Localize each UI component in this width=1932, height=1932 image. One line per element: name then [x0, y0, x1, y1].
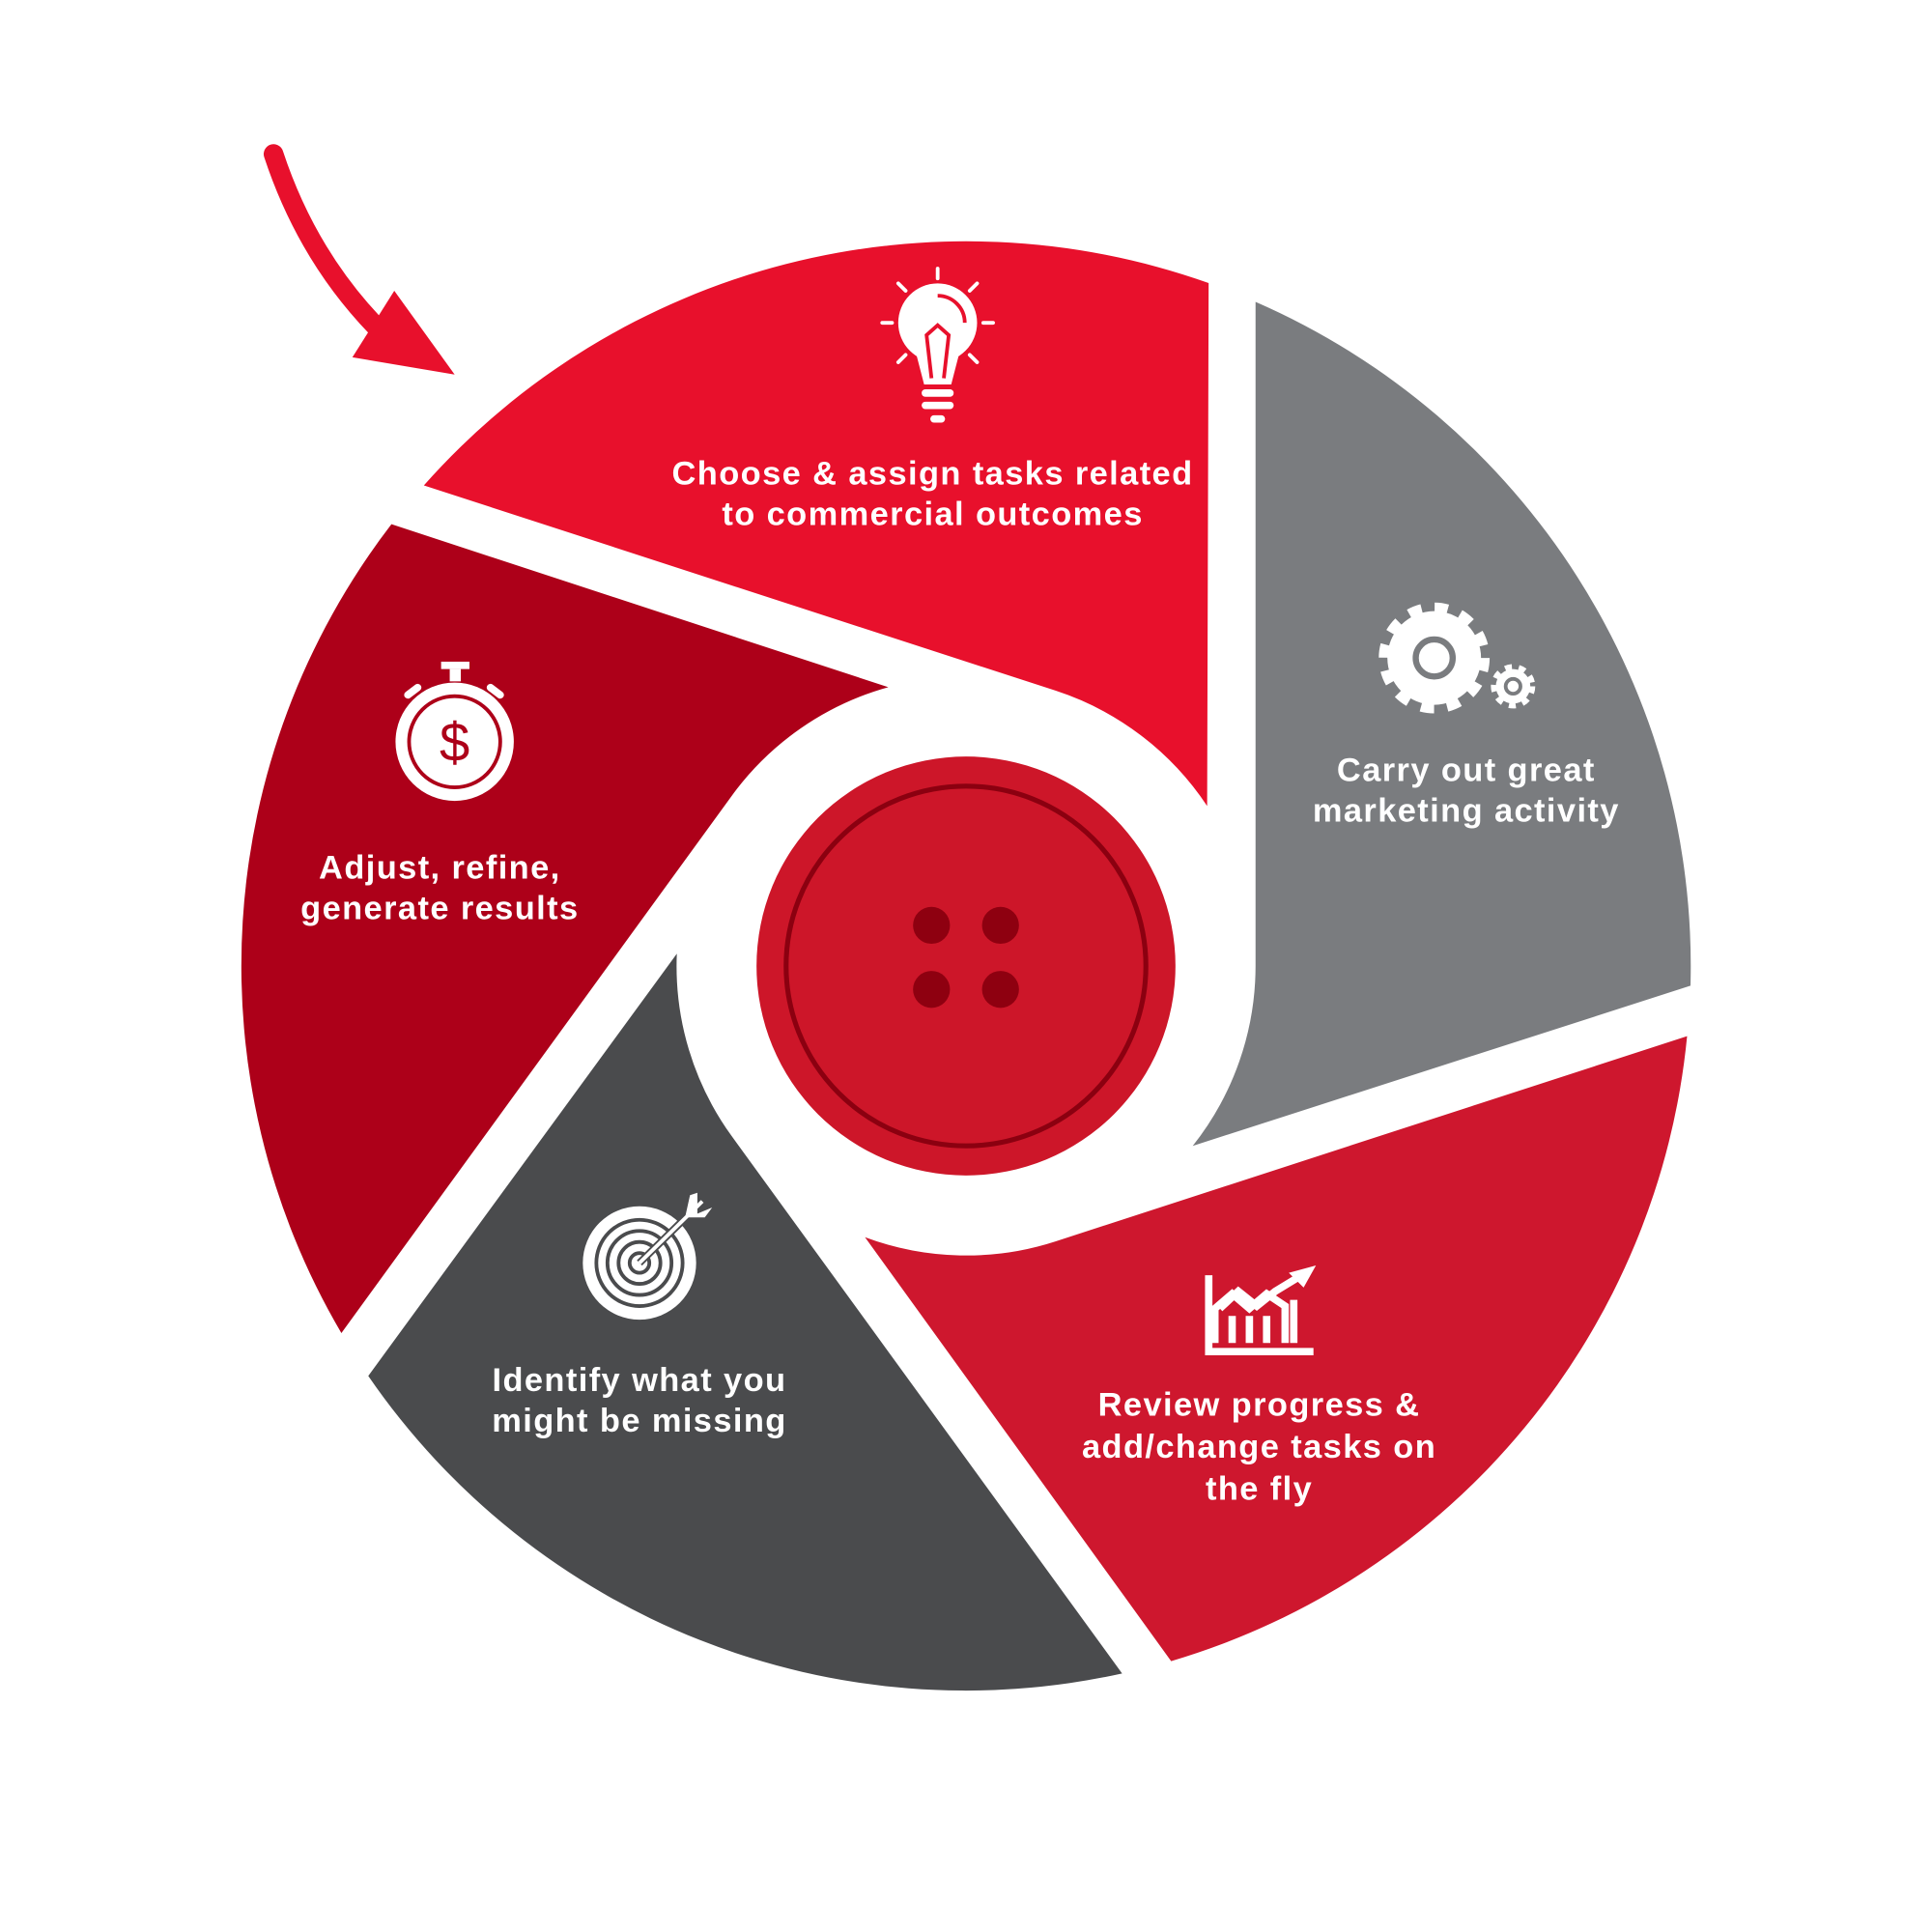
- arrow: start: [273, 154, 455, 375]
- icon: gears: [1387, 611, 1530, 705]
- text: identify: might be missing: [492, 1403, 787, 1439]
- text: review progress: the fly: [1206, 1470, 1313, 1507]
- text: identify: [492, 1362, 787, 1439]
- text: review progress: [1082, 1387, 1436, 1507]
- text: choose & assign: Choose & assign tasks related: [672, 455, 1194, 492]
- text: carry out: Carry out great: [1337, 753, 1596, 789]
- segment: identify missing: [274, 953, 1173, 1929]
- segment: review progress: [865, 977, 1822, 1711]
- text: adjust: [300, 849, 580, 927]
- icon: chart: [1208, 1265, 1316, 1351]
- icon: stopwatch: [395, 662, 514, 801]
- text: adjust: generate results: [300, 891, 580, 927]
- segment: carry out: [1193, 301, 1690, 1146]
- text: review progress: add/change tasks on: [1082, 1429, 1436, 1465]
- center button: [756, 756, 1176, 1176]
- text: identify: Identify what you: [492, 1362, 786, 1399]
- text: choose & assign: [672, 455, 1194, 532]
- text: carry out: [1313, 753, 1620, 830]
- text: carry out: marketing activity: [1313, 793, 1620, 830]
- text: adjust: Adjust, refine,: [319, 849, 561, 886]
- icon: lightbulb: [882, 269, 993, 423]
- text: review progress: Review progress &: [1098, 1387, 1420, 1424]
- text: choose & assign: to commercial outcomes: [722, 496, 1144, 532]
- segment: choose & assign: [405, 71, 1361, 806]
- segment: adjust refine: [0, 394, 889, 1370]
- icon: stopwatch: $: [440, 712, 469, 773]
- icon: target: [582, 1193, 712, 1320]
